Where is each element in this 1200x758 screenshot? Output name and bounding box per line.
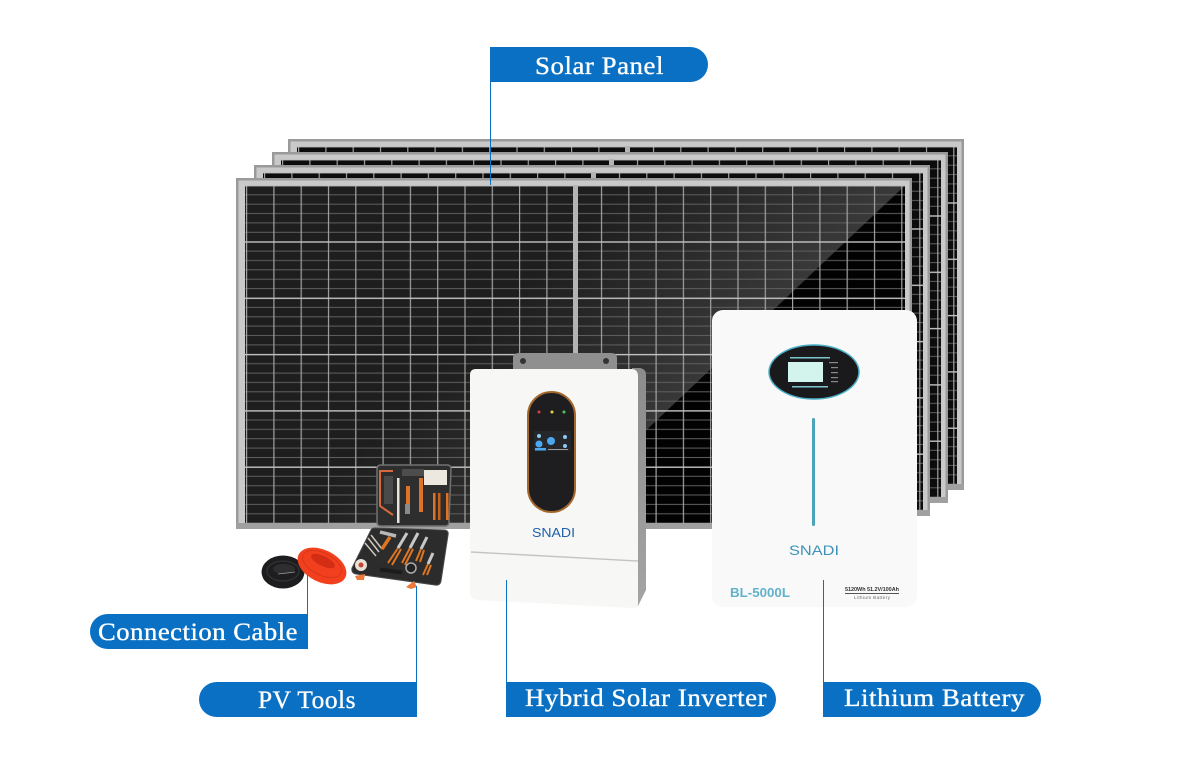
lithium battery — [712, 310, 917, 607]
inverter mounting bracket — [513, 353, 617, 372]
battery indicator bar — [812, 418, 815, 526]
inverter side face — [630, 368, 646, 606]
connection cable coils — [262, 540, 352, 592]
label: lithium battery: Lithium Battery — [844, 685, 1025, 712]
inverter logo: SNADI — [532, 525, 575, 540]
tools leader line — [416, 586, 418, 684]
battery display — [769, 345, 859, 399]
battery body — [712, 310, 917, 607]
battery logo: SNADI — [789, 542, 839, 558]
back solar panel 4 — [288, 139, 964, 490]
battery leader line — [822, 580, 824, 684]
label: connection cable — [90, 614, 308, 649]
battery specification — [845, 587, 900, 600]
label: connection cable: Connection Cable — [98, 619, 298, 646]
label: solar panel: Solar Panel — [535, 53, 664, 80]
solar panel leader line — [490, 80, 492, 185]
back solar panel 3 — [272, 152, 948, 503]
tool case lid — [377, 465, 451, 526]
label: hybrid solar inverter: Hybrid Solar Inverter — [525, 685, 767, 712]
label: solar panel — [490, 47, 708, 82]
inverter display — [528, 392, 575, 512]
battery model: BL-5000L — [730, 586, 790, 600]
label: hybrid solar inverter — [506, 682, 776, 717]
battery specification: Lithium Battery — [854, 595, 891, 600]
front solar panel — [236, 178, 912, 529]
label: lithium battery — [823, 682, 1041, 717]
hybrid solar inverter — [470, 353, 646, 608]
solar panel array — [236, 139, 964, 529]
label: pv tools: PV Tools — [258, 687, 356, 714]
label: pv tools — [199, 682, 417, 717]
pv tool kit — [352, 465, 451, 589]
back solar panel 2 — [254, 165, 930, 516]
battery specification: 5120Wh 51.2V/100Ah — [845, 587, 900, 593]
red cable coil — [292, 540, 352, 592]
tool case tray — [352, 528, 448, 589]
black cable coil — [262, 556, 304, 588]
inverter seam — [471, 552, 638, 561]
cable leader line — [306, 575, 308, 616]
inverter leader line — [506, 580, 508, 684]
inverter body — [470, 369, 638, 608]
